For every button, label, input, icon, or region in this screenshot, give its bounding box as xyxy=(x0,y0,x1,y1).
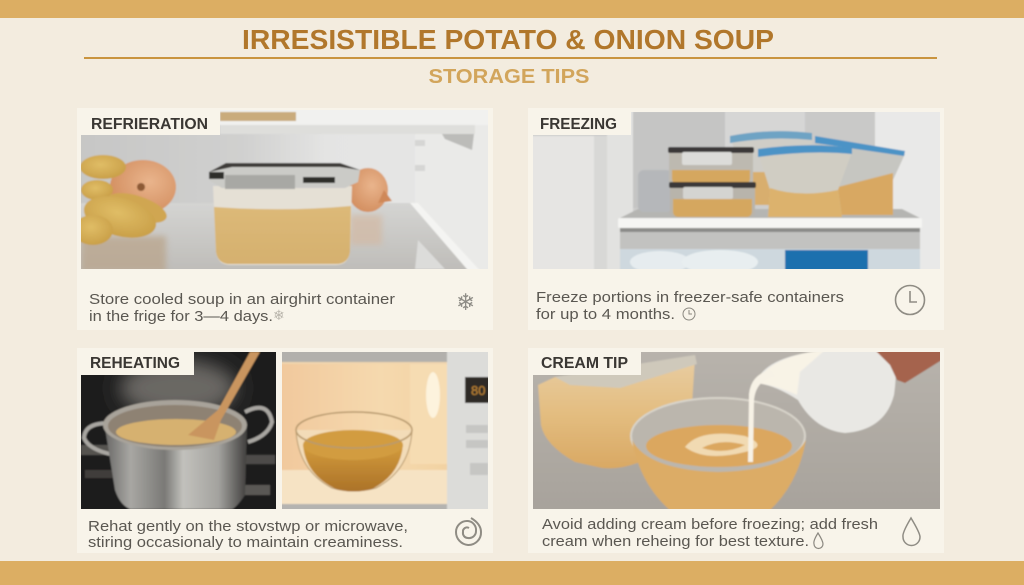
jug xyxy=(756,350,896,433)
right bag xyxy=(840,151,904,186)
shelf xyxy=(620,209,920,218)
text: cream tip: Avoid adding cream before froezing; add fresh xyxy=(542,516,878,533)
front bag xyxy=(764,153,850,193)
panel: refrigeration: in the frige for 3—4 days. xyxy=(89,308,273,325)
label: reheating: REHEATING xyxy=(90,355,180,372)
label: freezing xyxy=(528,110,631,135)
panel: reheating xyxy=(75,346,493,553)
rear onion xyxy=(348,168,388,212)
storage jar xyxy=(538,358,695,468)
frozen packs xyxy=(638,170,670,210)
label: cream tip: CREAM TIP xyxy=(541,355,628,372)
photo: soup container in fridge xyxy=(81,110,488,269)
label: cream tip xyxy=(533,352,641,375)
panel: cream tip: cream when reheing for best texture. xyxy=(542,533,809,550)
icon: clock xyxy=(896,286,924,314)
label: refrigeration xyxy=(77,110,220,135)
icon: small drop xyxy=(814,533,823,548)
subtitle: STORAGE TIPS xyxy=(428,66,590,88)
bottom band xyxy=(0,561,1024,585)
hand xyxy=(876,352,940,384)
icon: drop xyxy=(903,518,920,546)
icon: small snowflake: ❄ xyxy=(273,307,285,323)
rear bag xyxy=(733,138,805,166)
icon: small clock xyxy=(683,308,695,320)
reflections xyxy=(81,236,166,272)
panel: cream tip xyxy=(528,346,946,553)
text: reheating tip: Rehat gently on the stovstwp or microwave, xyxy=(88,518,408,535)
potatoes and onion xyxy=(110,160,176,214)
photo: bowl in microwave: 80 xyxy=(471,383,485,398)
photo: cream poured into soup xyxy=(528,346,946,514)
photo: pot on stove xyxy=(81,352,276,509)
label: refrigeration: REFRIERATION xyxy=(91,116,208,133)
top band xyxy=(0,0,1024,18)
photo: freezer shelves xyxy=(528,106,946,274)
icon: stirring spiral xyxy=(456,518,481,545)
panel: freezing: for up to 4 months. xyxy=(536,306,675,323)
cream stream xyxy=(746,374,762,464)
title: IRRESISTIBLE POTATO & ONION SOUP xyxy=(242,24,774,55)
panel: refrigeration xyxy=(73,105,495,330)
panel: reheating: stiring occasionaly to maintain creaminess. xyxy=(88,534,403,551)
label: reheating xyxy=(81,352,194,375)
photo: bowl in microwave xyxy=(278,348,492,513)
container xyxy=(213,186,352,265)
text: refrigeration tip: Store cooled soup in an airghirt container xyxy=(89,291,395,308)
text: freezing tip: Freeze portions in freezer-safe containers xyxy=(536,289,844,306)
label: freezing: FREEZING xyxy=(540,116,617,133)
panel: freezing xyxy=(528,106,946,330)
containers xyxy=(668,147,754,185)
bowl xyxy=(631,398,805,474)
glass bowl xyxy=(296,430,412,491)
icon: snowflake: ❄ xyxy=(456,289,475,315)
